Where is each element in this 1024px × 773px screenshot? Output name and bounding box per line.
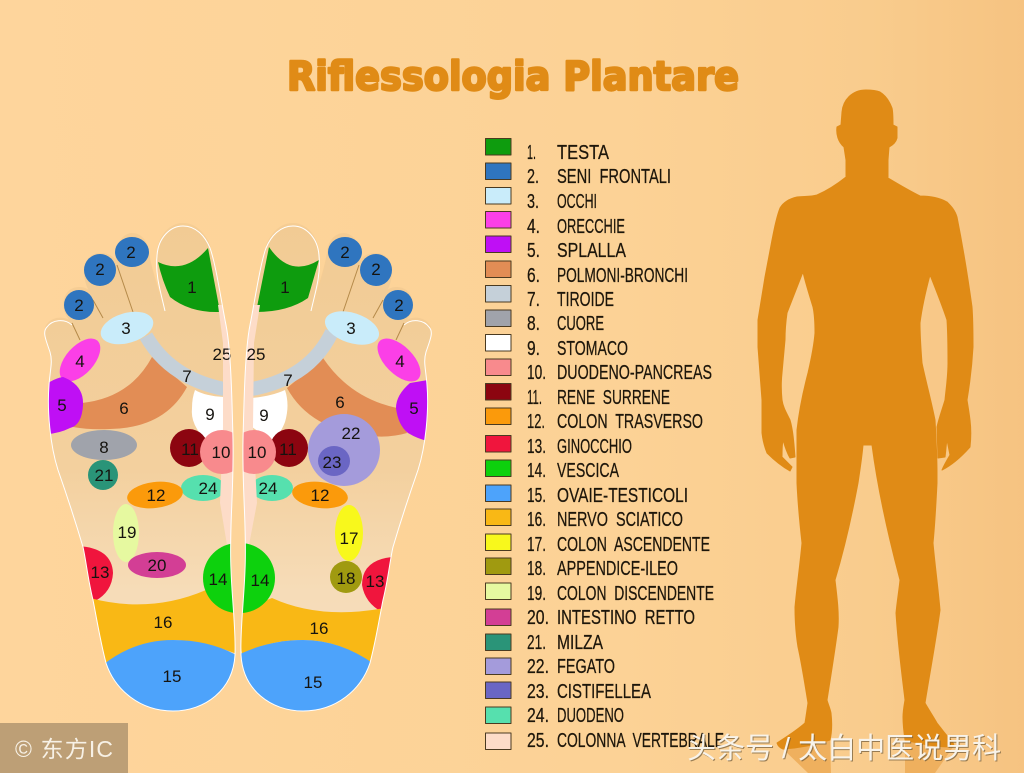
- legend item 17: 17.: [527, 534, 546, 556]
- watermark: left credit box: [0, 723, 128, 773]
- legend item 1: TESTA: [557, 142, 610, 164]
- zone 11: [170, 429, 208, 467]
- zone 4: 4: [75, 352, 85, 371]
- zone 10: 10: [248, 443, 266, 462]
- zone 12: 12: [147, 486, 165, 505]
- zone 21: [88, 460, 118, 490]
- zone 4: [52, 331, 108, 389]
- zone 3: 3: [121, 319, 131, 338]
- zone 18: [330, 561, 362, 593]
- legend item 8: 8.: [527, 313, 540, 335]
- zone 9: 9: [259, 406, 269, 425]
- zone 11: [270, 429, 308, 467]
- legend item 20: INTESTINO RETTO: [557, 607, 695, 629]
- zone 13: 13: [91, 563, 109, 582]
- zone 12: [126, 479, 184, 511]
- zone 1: [256, 247, 319, 312]
- zone 7: [146, 336, 224, 389]
- legend item 15: [486, 485, 688, 507]
- legend item 23: [486, 681, 651, 703]
- legend item 4: ORECCHIE: [557, 216, 625, 238]
- legend: [486, 138, 724, 752]
- legend item 18: 18.: [527, 558, 546, 580]
- watermark: right credit text: 头条号 / 太白中医说男科: [687, 732, 1001, 765]
- legend item 13: GINOCCHIO: [557, 436, 632, 458]
- legend item 7: [486, 286, 614, 311]
- zone 21: 21: [95, 466, 113, 485]
- legend item 1: [486, 138, 610, 164]
- legend item 18: [486, 558, 678, 580]
- zone 12: [291, 479, 349, 511]
- legend item 12: COLON TRASVERSO: [557, 411, 703, 433]
- zone 14: [242, 544, 275, 613]
- right foot diagram: [240, 226, 432, 712]
- legend item 12: [486, 408, 703, 433]
- legend item 24: 24.: [527, 705, 549, 727]
- zone 2: 2: [340, 243, 350, 262]
- zone 2: 2: [126, 243, 136, 262]
- zone 16: 16: [154, 613, 172, 632]
- zone 17: [335, 505, 363, 561]
- zone 13: [362, 557, 390, 610]
- legend item 3: 3.: [527, 191, 539, 213]
- zone 24: 24: [259, 479, 277, 498]
- zone 6: 6: [119, 399, 129, 418]
- zone 14: 14: [251, 571, 269, 590]
- zone 22: [308, 414, 380, 486]
- legend item 9: [486, 334, 628, 360]
- legend item 23: CISTIFELLEA: [557, 681, 651, 703]
- zone 3: [321, 305, 383, 351]
- zone 6: 6: [335, 393, 345, 412]
- legend item 14: 14.: [527, 460, 546, 482]
- zone 2: [328, 237, 362, 267]
- zone 18: 18: [337, 569, 355, 588]
- legend item 13: 13.: [527, 436, 546, 458]
- zone 8: 8: [99, 438, 109, 457]
- legend item 6: 6.: [527, 265, 540, 287]
- zone 6: [287, 358, 407, 437]
- legend item 23: 23.: [527, 681, 549, 703]
- zone 20: 20: [148, 556, 166, 575]
- zone 24: [181, 475, 225, 501]
- zone 23: [318, 446, 350, 476]
- zone 16: 16: [310, 619, 328, 638]
- zone 19: 19: [118, 523, 136, 542]
- legend item 16: NERVO SCIATICO: [557, 509, 683, 531]
- legend item 4: [486, 212, 625, 238]
- zone 16: [90, 590, 240, 665]
- zone 16: [236, 598, 385, 664]
- zone 24: 24: [199, 479, 217, 498]
- zone 2: 2: [95, 260, 105, 279]
- zone 10: [200, 430, 233, 474]
- legend item 3: [486, 188, 597, 213]
- zone 2: 2: [371, 260, 381, 279]
- legend item 19: COLON DISCENDENTE: [557, 583, 714, 605]
- legend item 14: VESCICA: [557, 460, 619, 482]
- legend item 12: 12.: [527, 411, 545, 433]
- legend item 10: [486, 359, 712, 384]
- zone 5: [396, 380, 428, 441]
- zone 10: [243, 430, 276, 474]
- zone 1: 1: [280, 278, 290, 297]
- legend item 24: [486, 705, 624, 727]
- zone 4: [370, 331, 428, 389]
- zone 25: spine: 25: [213, 345, 231, 364]
- legend item 17: [486, 534, 710, 556]
- zone 14: 14: [209, 570, 227, 589]
- zone 20: [128, 552, 186, 578]
- legend item 8: [486, 310, 604, 335]
- legend item 15: OVAIE-TESTICOLI: [557, 485, 688, 507]
- zone 17: 17: [340, 529, 358, 548]
- legend item 6: POLMONI-BRONCHI: [557, 265, 688, 287]
- zone 25: spine: 25: [247, 345, 265, 364]
- zone 4: 4: [395, 352, 405, 371]
- left foot diagram: [44, 226, 236, 712]
- legend item 6: [486, 261, 688, 287]
- zone 15: [106, 640, 234, 710]
- legend item 7: 7.: [527, 289, 540, 311]
- title: Riflessologia Plantare: [287, 54, 739, 100]
- zone 1: [158, 248, 220, 312]
- legend item 25: COLONNA VERTEBRALE: [557, 730, 724, 752]
- zone 15: [240, 640, 374, 715]
- legend item 20: 20.: [527, 607, 549, 629]
- legend item 4: 4.: [527, 216, 540, 238]
- human silhouette: [758, 90, 973, 773]
- legend item 1: 1.: [527, 142, 536, 164]
- legend item 9: STOMACO: [557, 338, 628, 360]
- zone 5: [48, 377, 83, 434]
- legend item 21: [486, 632, 604, 654]
- zone 1: 1: [187, 278, 197, 297]
- zone 3: [97, 306, 157, 350]
- zone 12: 12: [311, 486, 329, 505]
- zone 3: 3: [346, 319, 356, 338]
- legend item 22: FEGATO: [557, 656, 615, 678]
- zone 13: 13: [366, 572, 384, 591]
- legend item 21: 21.: [527, 632, 546, 654]
- legend item 19: 19.: [527, 583, 546, 605]
- zone 2: [383, 290, 413, 320]
- zone 14: [203, 544, 234, 613]
- legend item 13: [486, 436, 632, 458]
- legend item 24: DUODENO: [557, 705, 624, 727]
- zone 23: 23: [323, 453, 341, 472]
- legend item 5: 5.: [527, 240, 540, 262]
- legend item 16: 16.: [527, 509, 546, 531]
- zone 7: 7: [182, 367, 192, 386]
- zone 9: 9: [205, 405, 215, 424]
- left foot outline: [45, 226, 235, 711]
- legend item 11: 11.: [527, 387, 542, 409]
- legend item 3: OCCHI: [557, 191, 597, 213]
- zone 7: 7: [283, 371, 293, 390]
- zone 6: [73, 357, 187, 429]
- right foot outline: [241, 226, 431, 711]
- zone 2: [115, 237, 149, 267]
- legend item 9: 9.: [527, 338, 540, 360]
- legend item 8: CUORE: [557, 313, 604, 335]
- legend item 22: [486, 656, 615, 678]
- zone 5: 5: [409, 399, 419, 418]
- legend item 25: [486, 730, 724, 752]
- watermark: left credit box: © 东方IC: [15, 736, 113, 762]
- legend item 11: RENE SURRENE: [557, 387, 670, 409]
- zone 2: 2: [394, 296, 404, 315]
- zone 2: [360, 254, 392, 286]
- legend item 7: TIROIDE: [557, 289, 614, 311]
- zone 25: spine: [244, 305, 265, 544]
- zone 15: 15: [163, 667, 181, 686]
- zone 2: 2: [74, 296, 84, 315]
- zone 10: 10: [212, 443, 230, 462]
- zone 19: [113, 504, 139, 562]
- legend item 5: [486, 236, 627, 262]
- watermark: right credit text: 头条号 / 太白中医说男科: [688, 733, 1002, 766]
- legend item 22: 22.: [527, 656, 549, 678]
- zone 2: [64, 290, 94, 320]
- legend item 19: [486, 583, 714, 605]
- legend item 20: [486, 607, 695, 629]
- legend item 18: APPENDICE-ILEO: [557, 558, 678, 580]
- zone 5: 5: [57, 396, 67, 415]
- zone 7: [252, 332, 332, 390]
- legend item 16: [486, 509, 683, 531]
- legend item 15: 15.: [527, 485, 546, 507]
- zone 11: 11: [181, 440, 199, 459]
- zone 24: [251, 475, 293, 501]
- legend item 25: 25.: [527, 730, 549, 752]
- zone 9: [252, 390, 288, 441]
- legend item 21: MILZA: [557, 632, 604, 654]
- zone 15: 15: [304, 673, 322, 692]
- zone 2: [84, 254, 116, 286]
- left foot sole: [46, 226, 234, 654]
- legend item 5: SPLALLA: [557, 240, 627, 262]
- legend item 17: COLON ASCENDENTE: [557, 534, 710, 556]
- zone 13: [83, 546, 113, 600]
- legend item 2: SENI FRONTALI: [557, 166, 671, 188]
- zone 11: 11: [279, 440, 297, 459]
- zone 8: [71, 430, 137, 460]
- legend item 2: 2.: [527, 166, 539, 188]
- right foot sole: [242, 226, 430, 654]
- zone 9: [192, 390, 224, 441]
- legend item 14: [486, 460, 619, 482]
- legend item 10: DUODENO-PANCREAS: [557, 362, 712, 384]
- zone 25: spine: [213, 305, 232, 545]
- legend item 11: [486, 384, 670, 409]
- legend item 10: 10.: [527, 362, 546, 384]
- zone 22: 22: [342, 424, 360, 443]
- legend item 2: [486, 163, 671, 188]
